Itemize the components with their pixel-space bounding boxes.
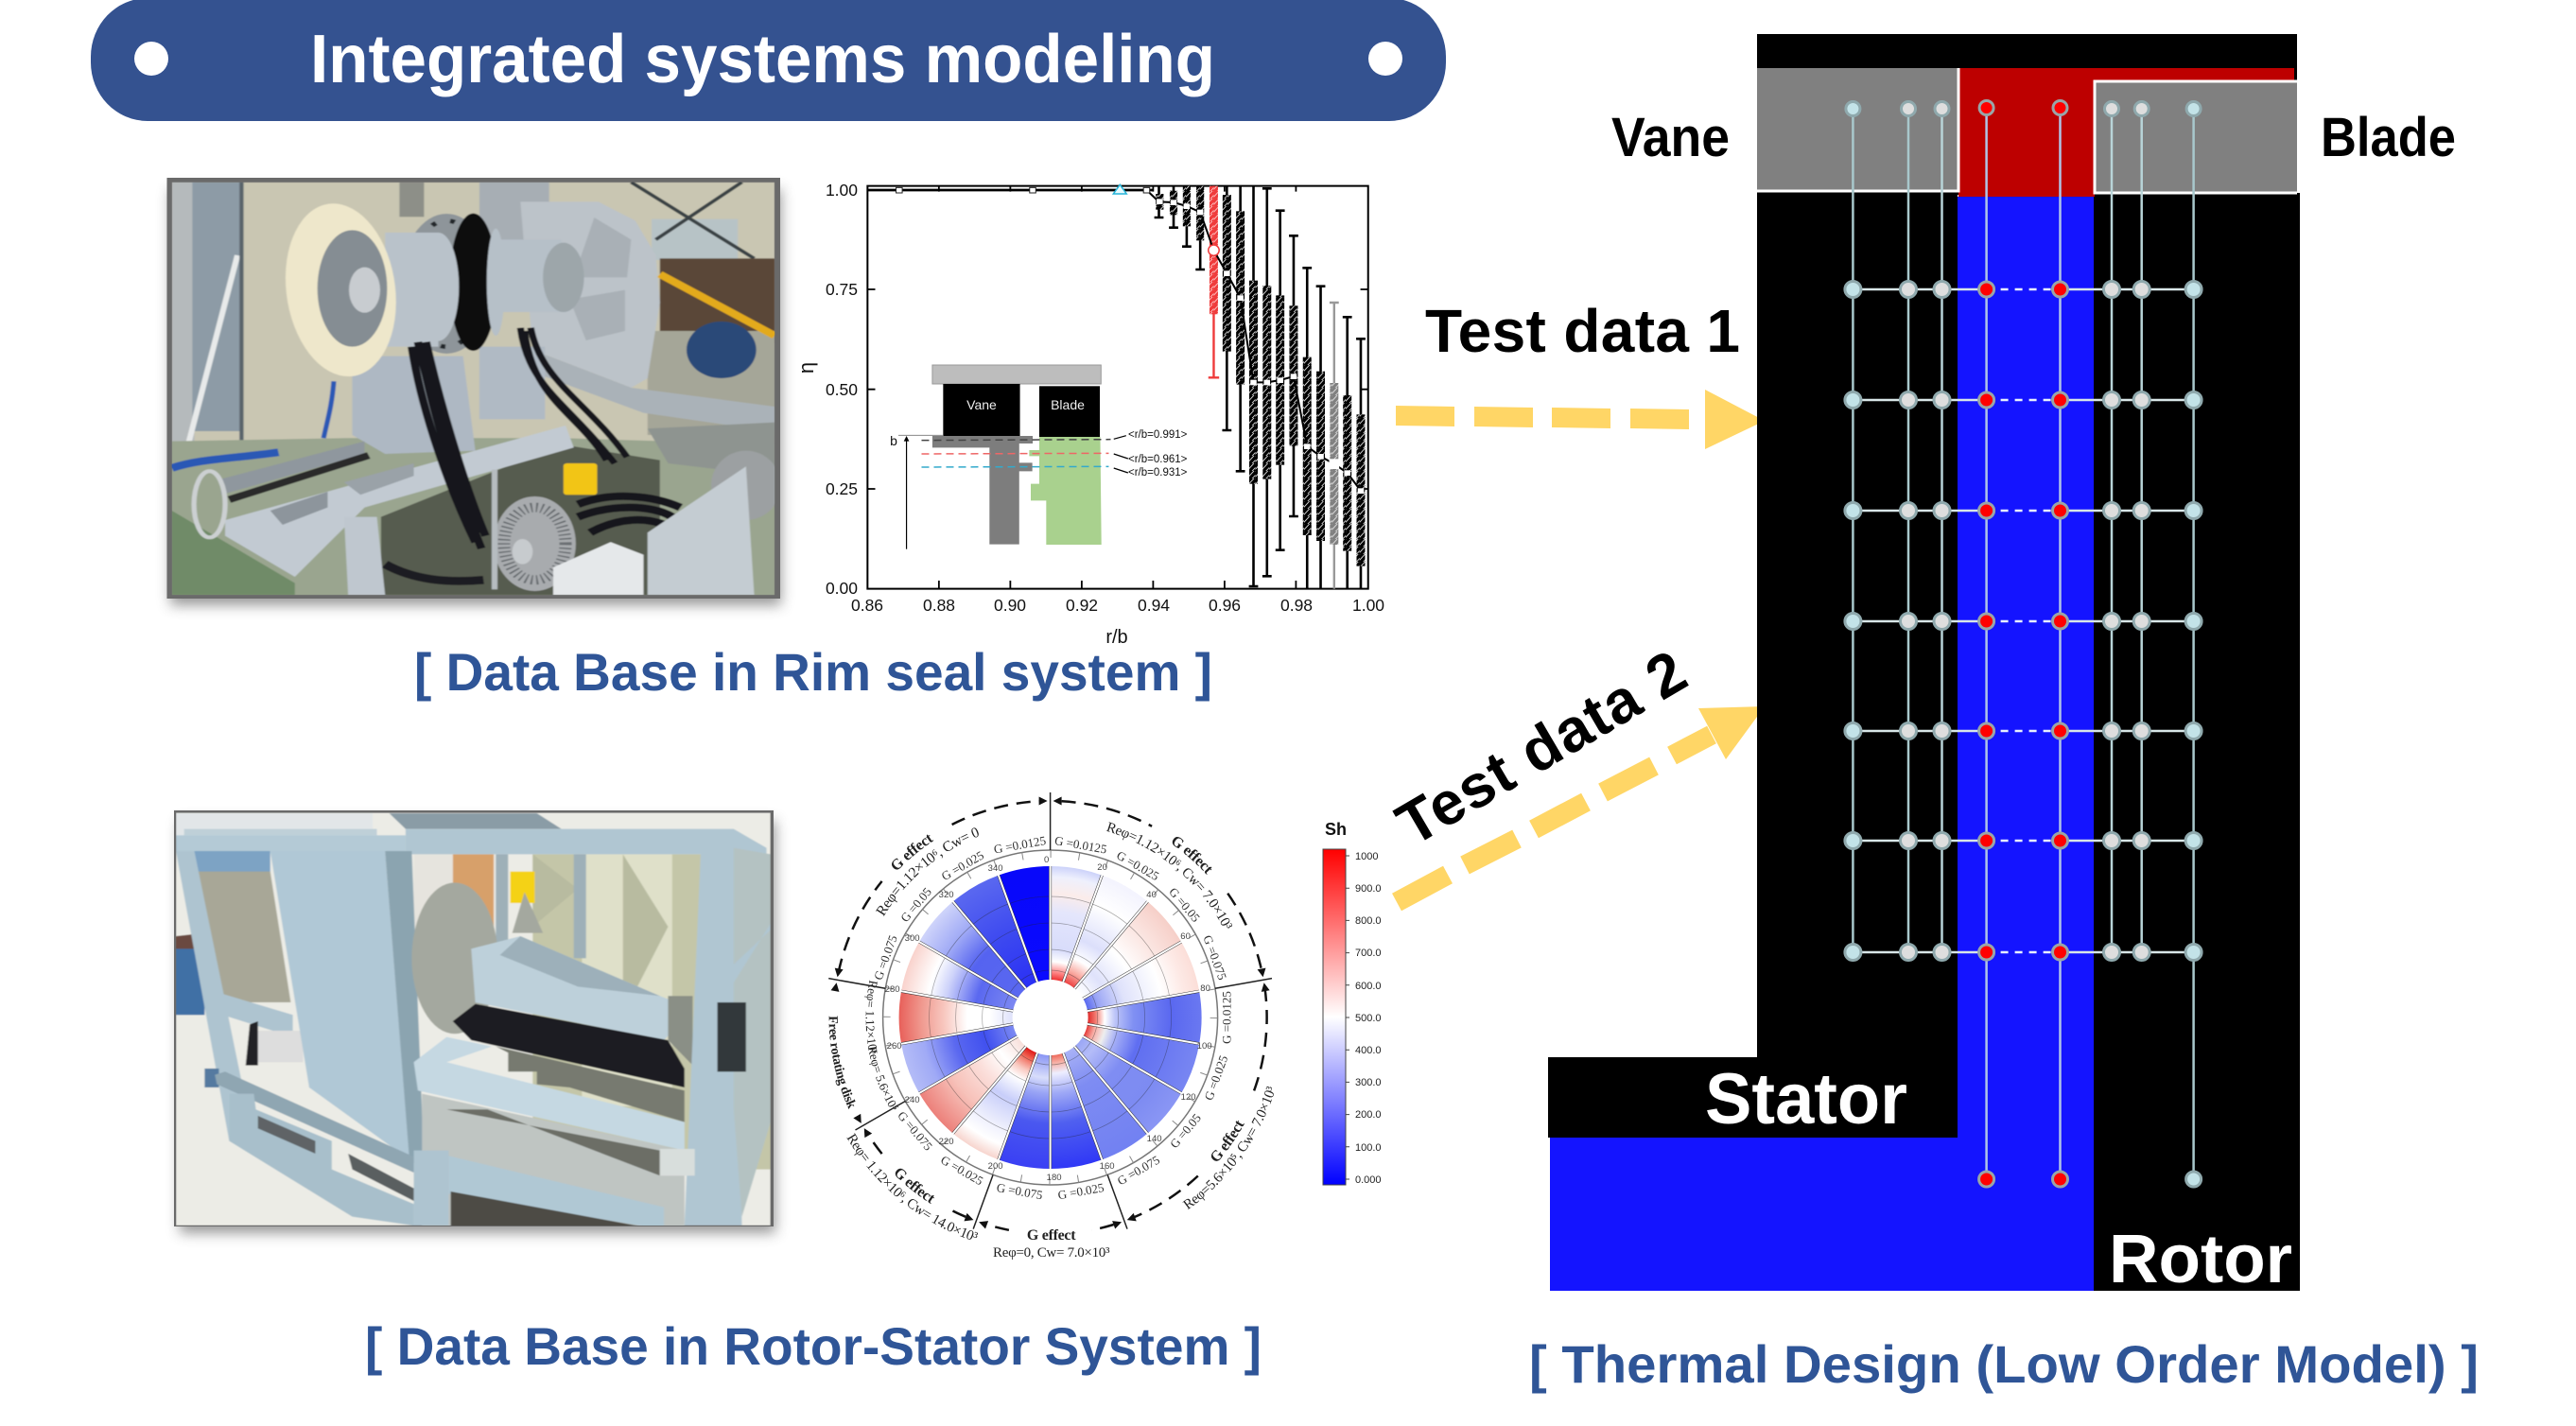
chart axis labels: 0.92	[1066, 596, 1098, 615]
angle labels: 180	[1047, 1173, 1062, 1183]
color legend: Sh: Sh	[1325, 820, 1347, 839]
angle labels: 60	[1180, 931, 1191, 942]
title banner	[91, 0, 1446, 121]
panel: effectiveness box plot chart	[794, 181, 1384, 648]
plot frame	[867, 186, 1368, 589]
angle labels: 120	[1181, 1092, 1196, 1103]
group captions	[828, 822, 1274, 1261]
color legend: Sh: 700.0	[1355, 948, 1382, 959]
chart axis labels: 0.25	[826, 479, 858, 498]
color legend: Sh	[1323, 820, 1382, 1186]
chart axis labels: 0.88	[923, 596, 955, 615]
angle labels: 220	[939, 1137, 954, 1147]
angle labels: 0	[1044, 855, 1049, 865]
color legend: Sh: 0.000	[1355, 1174, 1382, 1186]
chart axis labels: 0.50	[826, 380, 858, 399]
group separators	[828, 792, 1272, 1229]
chart axis labels: 0.94	[1138, 596, 1170, 615]
inset labels: Vane	[966, 397, 997, 412]
blade block	[2095, 81, 2297, 193]
group captions: G effect	[1173, 837, 1212, 875]
angle labels: 80	[1200, 983, 1210, 994]
chart axis labels: 0.90	[994, 596, 1026, 615]
chart axis labels: 0.86	[851, 596, 883, 615]
color legend: Sh: 600.0	[1355, 981, 1382, 992]
chart axis labels: 0.96	[1209, 596, 1241, 615]
color legend: Sh: 100.0	[1355, 1142, 1382, 1154]
color legend: Sh: 300.0	[1355, 1077, 1382, 1088]
banner bullet left	[134, 42, 168, 76]
heading: rotor-stator data base: [ Data Base in Rotor-Stator System ]	[365, 1316, 1262, 1376]
inset labels	[890, 397, 1188, 478]
inset: vane and blade schematic	[898, 365, 1128, 549]
G value labels: G =0.025	[938, 1153, 985, 1188]
network nodes: grid rows	[1845, 282, 2202, 961]
angle labels: 260	[887, 1041, 902, 1052]
network nodes: bottom row	[1979, 1172, 2202, 1187]
casing and rotor solid	[1548, 34, 2300, 1291]
panel: polar Sherwood number map	[828, 792, 1274, 1261]
label: stator: Stator	[1705, 1059, 1907, 1139]
banner bullet right	[1368, 42, 1402, 76]
G value labels: G =0.05	[1167, 1111, 1204, 1151]
angle labels	[885, 855, 1212, 1183]
chart axis labels	[794, 181, 1384, 648]
group captions: G effect	[1027, 1227, 1076, 1243]
chart axis labels: η	[794, 362, 818, 374]
arrow: test data 1	[1396, 390, 1765, 449]
G value labels: G =0.075	[1200, 933, 1229, 982]
G value labels: G =0.075	[871, 933, 900, 982]
network nodes: top row	[1846, 100, 2201, 115]
inset labels: <r/b=0.961>	[1128, 454, 1188, 465]
group captions: Reφ= 5.6×10⁵	[868, 1046, 898, 1110]
heading: thermal design: [ Thermal Design (Low Order Model) ]	[1529, 1334, 2479, 1394]
vane block	[1757, 68, 1958, 191]
chart axis labels: 0.00	[826, 579, 858, 598]
panel: rim seal test rig photo	[166, 178, 781, 605]
angle labels: 100	[1197, 1041, 1212, 1052]
angle labels: 160	[1100, 1161, 1115, 1172]
color legend: Sh: 1000	[1355, 851, 1378, 862]
angle labels: 240	[905, 1095, 920, 1105]
G value labels: G =0.05	[1166, 885, 1203, 925]
G value labels: G =0.075	[895, 1108, 935, 1154]
label: vane: Vane	[1611, 107, 1730, 168]
color legend: Sh: 400.0	[1355, 1045, 1382, 1056]
whiskers	[1155, 186, 1366, 589]
angle labels: 300	[905, 933, 920, 944]
inset labels: b	[890, 433, 897, 448]
G value labels: G =0.0125	[1220, 991, 1234, 1044]
group captions: Reφ= 1.12×10⁶	[864, 980, 878, 1053]
sector separators	[900, 865, 1200, 1170]
high-eta baseline	[867, 189, 1153, 191]
G value labels: G =0.075	[1115, 1153, 1162, 1188]
G value labels: G =0.025	[1201, 1053, 1230, 1102]
G value labels: G =0.0125	[993, 833, 1047, 857]
inset labels: Blade	[1051, 397, 1085, 412]
color legend: Sh: 500.0	[1355, 1013, 1382, 1024]
title text: Integrated systems modeling	[310, 22, 1215, 97]
inset labels: <r/b=0.991>	[1128, 429, 1188, 441]
contour lines	[930, 896, 1172, 1139]
G value labels	[871, 833, 1234, 1202]
angle labels: 320	[939, 890, 954, 900]
angle labels: 40	[1146, 890, 1157, 900]
angle labels: 140	[1147, 1134, 1162, 1144]
axis ticks	[867, 186, 1368, 589]
group captions: Free rotating disk	[828, 1016, 855, 1109]
G value labels: G =0.075	[996, 1180, 1044, 1202]
angle labels: 200	[988, 1161, 1003, 1172]
group captions: G effect	[892, 834, 934, 870]
angle labels: 340	[988, 863, 1003, 874]
group captions: Reφ=1.12×10⁶, Cw= 7.0×10³	[1106, 822, 1232, 929]
heading: rim seal data base: [ Data Base in Rim seal system ]	[414, 642, 1212, 702]
mean line	[1146, 190, 1361, 491]
label: rotor: Rotor	[2109, 1222, 2292, 1297]
arrow: test data 2	[1397, 706, 1765, 902]
group captions: Reφ=5.6×10⁵, Cw= 7.0×10³	[1182, 1086, 1274, 1210]
G value labels: G =0.025	[1056, 1180, 1105, 1202]
chart axis labels: 0.75	[826, 280, 858, 299]
group captions: G effect	[895, 1169, 934, 1204]
panel: thermal low order model	[1548, 34, 2300, 1297]
G value labels: G =0.025	[1114, 848, 1161, 883]
color legend: Sh: 800.0	[1355, 915, 1382, 927]
dashed group arcs	[839, 801, 1267, 1230]
label: test data 1: Test data 1	[1425, 297, 1740, 365]
group captions: G effect	[1210, 1120, 1244, 1161]
G value labels: G =0.025	[939, 848, 986, 883]
color legend: Sh: 900.0	[1355, 883, 1382, 895]
polar sectors	[893, 858, 1209, 1177]
G value labels: G =0.0125	[1053, 833, 1108, 857]
panel: rotor-stator test rig photo	[174, 810, 775, 1233]
color legend: Sh: 200.0	[1355, 1109, 1382, 1121]
chart axis labels: 0.98	[1280, 596, 1313, 615]
chart axis labels: r/b	[1105, 627, 1128, 648]
label: blade: Blade	[2321, 107, 2456, 168]
arc arrowheads	[831, 796, 1270, 1229]
chart axis labels: 1.00	[1352, 596, 1384, 615]
mean markers	[896, 184, 1364, 494]
hot gas path	[1958, 68, 2294, 197]
label: test data 2: Test data 2	[1385, 636, 1697, 859]
network vertical links	[1853, 109, 2194, 1179]
outer ring	[883, 850, 1218, 1185]
inset labels: <r/b=0.931>	[1128, 467, 1188, 478]
angle labels: 280	[885, 984, 900, 995]
group captions: Reφ=0, Cw= 7.0×10³	[993, 1245, 1110, 1261]
chart axis labels: 1.00	[826, 181, 858, 200]
group captions: Reφ= 1.12×10⁶, Cw= 14.0×10³	[846, 1133, 978, 1240]
angle labels: 20	[1097, 862, 1107, 873]
coolant path	[1550, 197, 2094, 1291]
G value labels: G =0.05	[897, 885, 934, 925]
group captions: Reφ=1.12×10⁶, Cw= 0	[876, 827, 979, 916]
hatched boxes	[1156, 186, 1365, 566]
